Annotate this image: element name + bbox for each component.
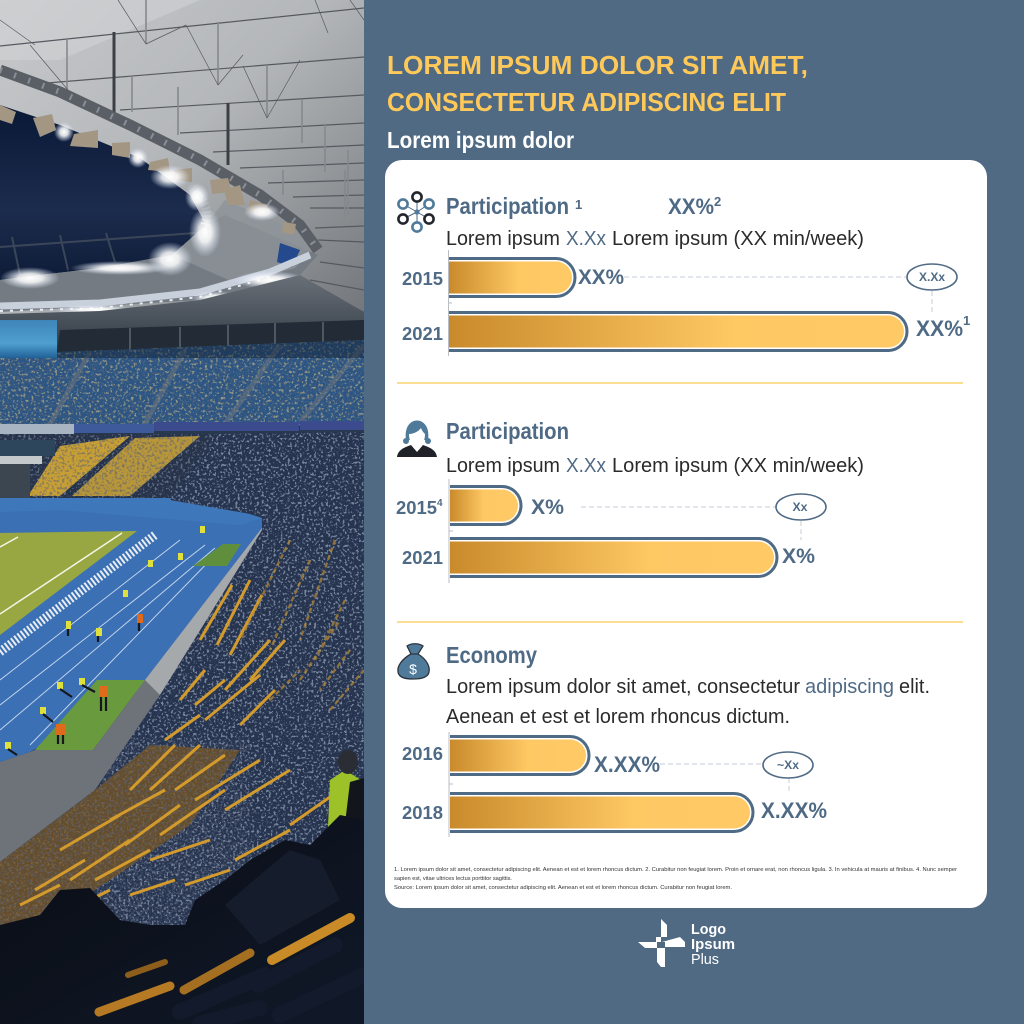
footnotes: Source: Lorem ipsum dolor sit amet, consectetur adipiscing elit. Aenean et est et lorem rhoncus dictum. Curabitur non feugiat lorem. (394, 885, 732, 891)
description (446, 676, 930, 728)
stadium photo (0, 0, 364, 1024)
footnotes: sapien est, vitae ultrices lectus porttitor sagittis. (394, 876, 512, 882)
value label with footnote: 1 (963, 313, 970, 328)
title: LOREM IPSUM DOLOR SIT AMET, (387, 52, 808, 80)
description: Lorem ipsum (XX min/week) (612, 228, 864, 250)
icon: money bag: $ (409, 661, 417, 677)
section: participation overall (398, 192, 970, 356)
year label 2021: 2021 (402, 548, 443, 568)
subtitle: Lorem ipsum dolor (387, 127, 574, 153)
description (446, 455, 864, 477)
logo text: Ipsum (691, 936, 735, 953)
year label 2018: 2018 (402, 803, 443, 823)
title: CONSECTETUR ADIPISCING ELIT (387, 89, 786, 117)
bar chart (402, 732, 827, 837)
heading: Participation (446, 193, 569, 219)
value label with footnote: XX% (916, 316, 963, 341)
callout oval (907, 264, 957, 290)
track and pitch (0, 498, 262, 862)
year label 2015 with note: 2015 (396, 498, 437, 518)
year label 2015 with note: 4 (437, 498, 443, 509)
footnotes: 1. Lorem ipsum dolor sit amet, consectetur adipiscing elit. Aenean et est et lorem rhoncus dictum. 2. Curabitur non feugiat lorem. Proin et ornare erat, non rhoncus ligula. 3. In vehicula at mauris at finibus. 4. Nunc semper (394, 867, 957, 873)
logo text: Logo (691, 921, 726, 938)
section: economy (398, 642, 930, 837)
value label: X.XX% (594, 752, 660, 777)
icon: network (398, 192, 434, 232)
logo text: Plus (691, 951, 719, 968)
bar: 2016 (450, 736, 589, 774)
description: adipiscing (805, 676, 894, 698)
panel: white card (385, 160, 987, 908)
icon: money bag (398, 644, 429, 679)
bar: 2021 (450, 538, 777, 576)
crowd stands (0, 432, 364, 1024)
callout oval: Xx (792, 500, 808, 514)
icon: woman (397, 420, 437, 457)
bar: 2018 (450, 794, 753, 832)
value label: XX% (578, 266, 624, 289)
bar chart (396, 479, 826, 583)
title (387, 52, 808, 117)
year label 2015: 2015 (402, 269, 443, 289)
headline value: XX% (668, 194, 714, 219)
athletes and stewards (5, 526, 205, 755)
value label: X.XX% (761, 798, 827, 823)
description (446, 228, 864, 250)
footnotes (394, 867, 957, 891)
year label 2016: 2016 (402, 744, 443, 764)
heading footnote mark: 1 (575, 197, 582, 212)
bar: 2021 (449, 312, 907, 350)
callout oval: X.Xx (919, 270, 945, 284)
description: Lorem ipsum (446, 228, 560, 250)
icon: pinwheel mark (638, 919, 685, 967)
bar: 2015 (450, 486, 521, 524)
logo (638, 919, 735, 968)
callout oval (776, 494, 826, 520)
description: X.Xx (566, 228, 606, 250)
callout oval (763, 752, 813, 778)
headline value: 2 (714, 194, 721, 209)
description: Aenean et est et lorem rhoncus dictum. (446, 706, 790, 728)
heading: Participation (446, 418, 569, 444)
description: X.Xx (566, 455, 606, 477)
value label: X% (782, 545, 815, 568)
section: participation women (396, 418, 864, 583)
heading: Economy (446, 642, 537, 668)
description: Lorem ipsum (XX min/week) (612, 455, 864, 477)
bar: 2015 (449, 258, 575, 296)
bar chart (402, 250, 970, 356)
description: elit. (899, 676, 930, 698)
description: Lorem ipsum (446, 455, 560, 477)
logo text (691, 921, 735, 968)
value label: X% (531, 496, 564, 519)
callout oval: ~Xx (777, 758, 799, 772)
description: Lorem ipsum dolor sit amet, consectetur (446, 676, 800, 698)
year label 2021: 2021 (402, 324, 443, 344)
